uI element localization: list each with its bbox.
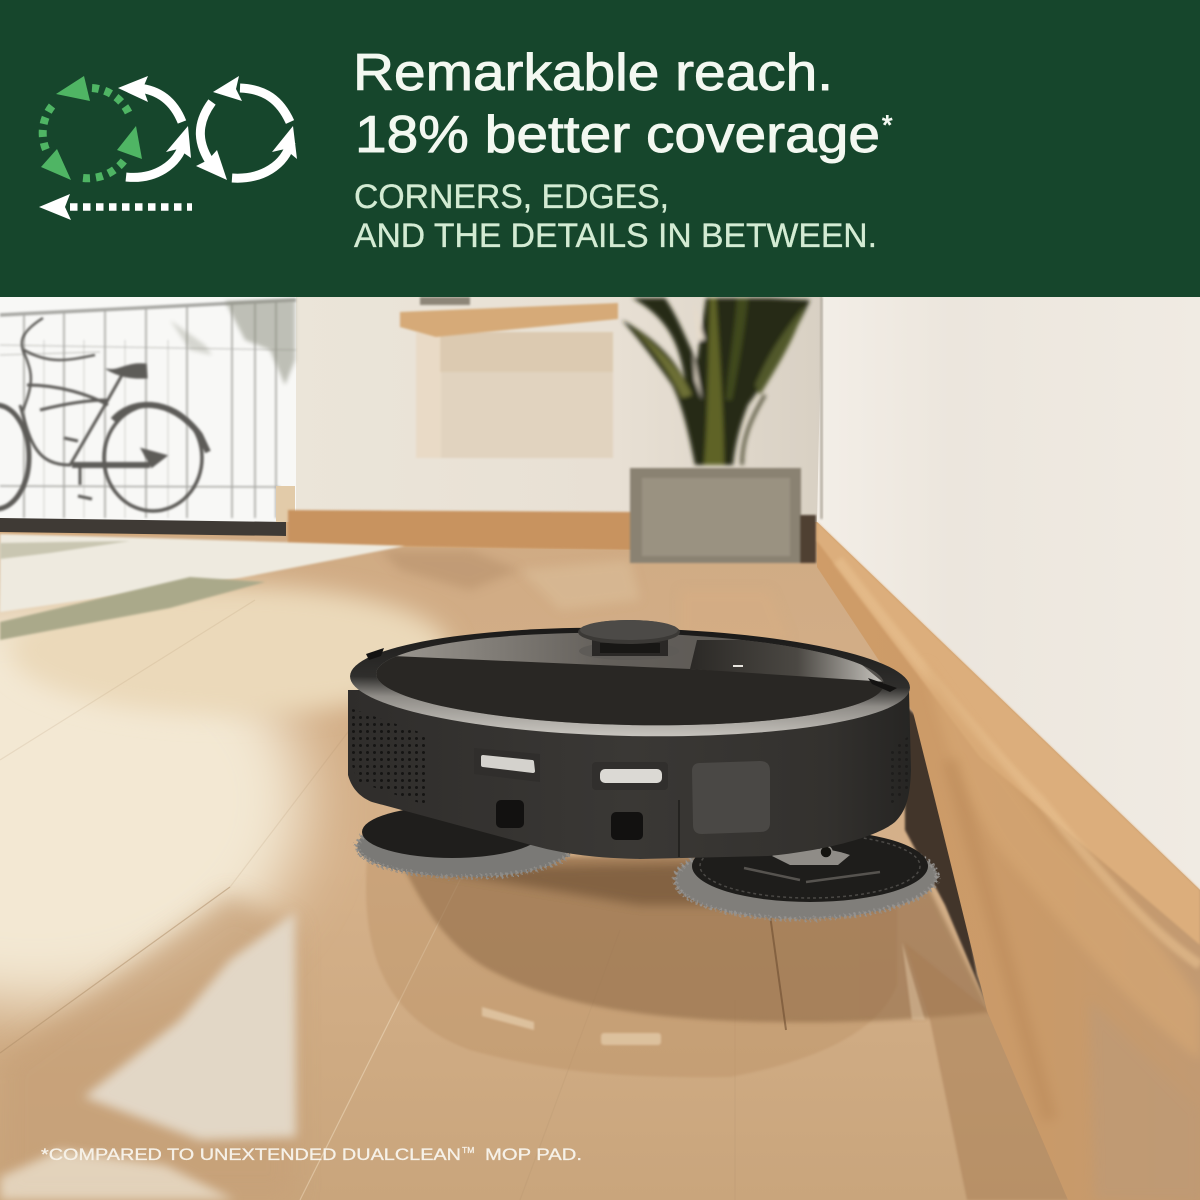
floor: lower-left plank tone <box>20 886 282 1068</box>
robot body <box>348 690 911 859</box>
subheading <box>354 178 877 255</box>
icon: dotted arrow left <box>39 194 192 220</box>
floor <box>0 535 1100 1200</box>
right wall <box>817 297 1200 890</box>
floor: reflected silver strips <box>482 1007 661 1045</box>
floor: bright cream glow <box>0 595 305 1005</box>
header banner <box>0 0 1200 297</box>
window frame and sill <box>0 486 295 536</box>
right mop pad <box>674 830 938 921</box>
icon: extended mop path circles <box>39 76 297 220</box>
footnote <box>41 1145 582 1164</box>
speaker grille right <box>890 735 910 805</box>
robot vacuum <box>348 620 938 921</box>
silver bumper sensor left <box>474 748 540 782</box>
concrete planter <box>630 468 816 563</box>
floor: small reflection sliver <box>902 942 925 1020</box>
lidar turret <box>578 620 680 660</box>
balcony window <box>0 297 296 522</box>
icon: green dotted circle <box>41 76 142 180</box>
potted plant <box>622 298 816 563</box>
speaker grille left <box>350 708 428 806</box>
rug <box>0 534 405 640</box>
rim notches <box>366 648 897 692</box>
hanging foliage <box>170 299 295 385</box>
top disc <box>376 633 884 726</box>
icon: bicycle silhouette <box>0 318 208 511</box>
heading: Remarkable reach. <box>353 44 833 102</box>
wall niche <box>416 332 613 458</box>
icon: white circle arrows, right <box>196 76 297 180</box>
camera left <box>496 800 524 828</box>
heading: 18% better coverage <box>355 106 880 164</box>
camera right <box>611 812 643 840</box>
glass panel <box>690 640 885 684</box>
footnote: TM <box>462 1145 474 1155</box>
left mop pad <box>357 806 573 877</box>
subheading: CORNERS, EDGES, <box>354 178 669 216</box>
subheading: AND THE DETAILS IN BETWEEN. <box>354 217 877 255</box>
floor: plank seams <box>0 600 442 1200</box>
square sensor panel <box>692 761 770 834</box>
photo: room scene <box>0 297 1200 1200</box>
footnote: *COMPARED TO UNEXTENDED DUALCLEAN <box>41 1146 461 1164</box>
footnote: MOP PAD. <box>485 1146 582 1164</box>
heading <box>353 44 893 164</box>
floor: robot shadow <box>400 850 990 1022</box>
fabric top <box>376 656 884 726</box>
background wall <box>295 297 825 522</box>
floor: baseboard cast shadow <box>929 1010 1068 1200</box>
plant leaves <box>622 298 810 465</box>
floor: window reflection <box>0 912 296 1200</box>
silver rim <box>349 622 911 742</box>
floor: robot reflection <box>366 860 897 1077</box>
icon: white circle arrows, left <box>118 76 191 177</box>
gap shadow behind robot <box>905 705 990 1012</box>
heading: * <box>882 110 893 140</box>
wall skirting <box>288 510 635 550</box>
right wooden baseboard <box>817 522 1200 1200</box>
glass panel lights <box>733 665 743 667</box>
silver bumper sensor right <box>592 762 668 790</box>
wooden shelf <box>400 297 618 337</box>
bumper seam <box>678 800 680 857</box>
